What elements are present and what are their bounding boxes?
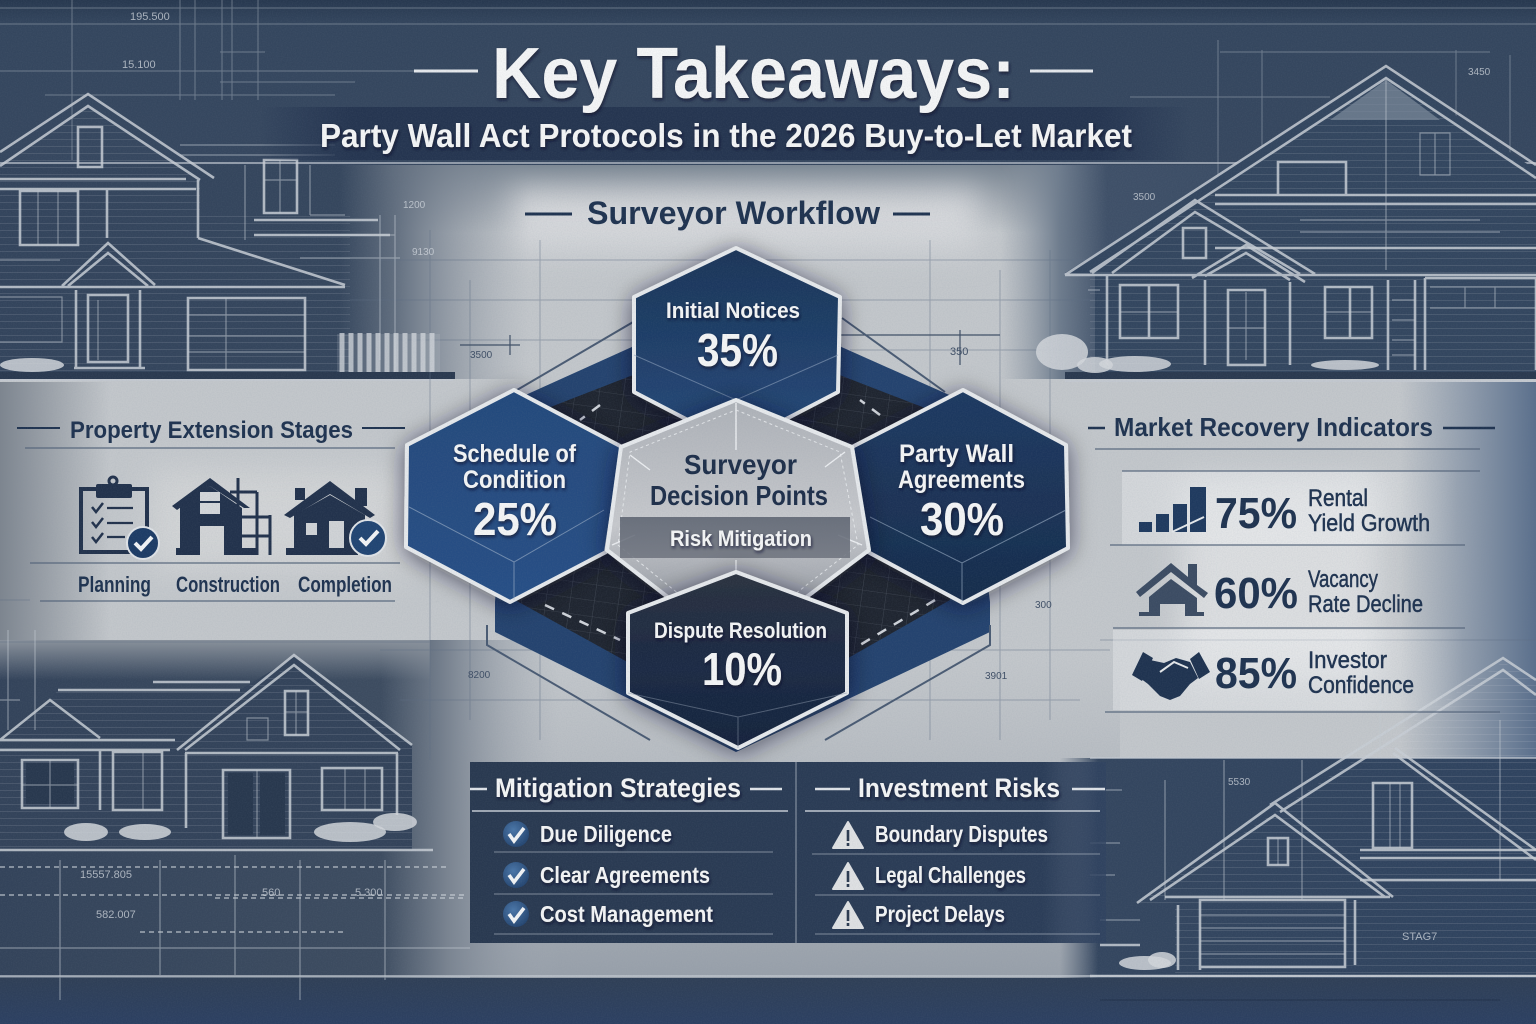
party wall agreements label: Party Wall: [899, 440, 1014, 468]
icon: house: [1136, 563, 1208, 616]
background: blueprint texture: 8200: [468, 670, 491, 681]
background: blueprint texture: 15.100: [122, 59, 156, 71]
heading: investment risks: Investment Risks: [858, 773, 1060, 803]
heading: surveyor workflow: Surveyor Workflow: [587, 195, 880, 231]
risk mitigation label: Risk Mitigation: [670, 526, 812, 551]
list item: project delays: Project Delays: [875, 901, 1005, 927]
indicator: vacancy rate decline: Rate Decline: [1308, 591, 1423, 618]
background: blueprint texture: 582.007: [96, 909, 136, 921]
indicator: rental yield growth: Yield Growth: [1308, 510, 1430, 537]
list item: cost management: Cost Management: [540, 901, 713, 927]
background: blueprint texture: 3901: [985, 671, 1008, 682]
column: investment risks: [805, 773, 1105, 934]
stage labels: Planning: [78, 572, 151, 597]
panel: property extension stages: [17, 417, 405, 601]
title: Key Takeaways:: [492, 34, 1015, 114]
list item: boundary disputes: Boundary Disputes: [875, 821, 1048, 847]
background: blueprint texture: 300: [1035, 600, 1052, 611]
indicator: rental yield growth: Rental: [1308, 485, 1368, 512]
stage labels: Construction: [176, 572, 280, 597]
list item: boundary disputes: [833, 821, 1048, 848]
illustration: top-right house: [1036, 66, 1536, 373]
stage labels: Completion: [298, 572, 392, 597]
heading: market recovery indicators: Market Recovery Indicators: [1114, 412, 1433, 442]
hexagon: dispute resolution: [628, 572, 847, 748]
background: blueprint texture: 1200: [403, 200, 426, 211]
schedule of condition value: 25%: [473, 493, 557, 545]
list item: project delays: [833, 901, 1005, 928]
background: blueprint texture: 5 300: [355, 887, 383, 899]
background: blueprint texture: 195.500: [130, 11, 170, 23]
party wall agreements label: [898, 440, 1025, 494]
background: blueprint texture: 3500: [1133, 192, 1156, 203]
indicator: investor confidence: Investor: [1308, 647, 1387, 674]
schedule of condition label: Condition: [463, 466, 566, 494]
initial notices value: 35%: [697, 324, 778, 376]
background: blueprint texture: 3450: [1468, 67, 1491, 78]
stage labels: [78, 572, 392, 597]
icon: completed home: [284, 481, 386, 556]
schedule of condition label: [453, 440, 577, 494]
background: blueprint texture: 9130: [412, 247, 435, 258]
hexagon: party wall agreements: [852, 390, 1068, 603]
center heading: Decision Points: [650, 480, 828, 511]
illustration: bottom-right house: [1090, 658, 1536, 1000]
party wall agreements value: 30%: [920, 493, 1004, 545]
background: blueprint texture: 350: [950, 346, 968, 358]
column: mitigation strategies: [470, 773, 788, 934]
list item: due diligence: [503, 821, 672, 847]
background: blueprint texture: 3500: [470, 350, 493, 361]
list item: clear agreements: Clear Agreements: [540, 862, 710, 888]
panel: mitigation strategies and investment risks: [470, 762, 1106, 943]
illustration: bottom-right house: STAG7: [1402, 931, 1437, 943]
schedule of condition label: Schedule of: [453, 440, 577, 468]
subtitle band: [260, 107, 1190, 160]
indicator: vacancy rate decline: Vacancy: [1308, 566, 1378, 593]
heading: mitigation strategies: Mitigation Strategies: [495, 773, 741, 803]
indicator: vacancy rate decline: 60%: [1214, 569, 1298, 618]
indicator: investor confidence: 85%: [1215, 649, 1297, 698]
icon: planning clipboard: [81, 477, 159, 559]
list item: due diligence: Due Diligence: [540, 821, 672, 847]
indicator: rental yield growth: 75%: [1215, 489, 1297, 538]
party wall agreements label: Agreements: [898, 466, 1025, 494]
illustration: bottom-left house: [0, 630, 470, 1000]
icon: handshake: [1132, 652, 1210, 700]
hexagon: initial notices: [634, 248, 840, 445]
background: blueprint texture: 5530: [1228, 777, 1251, 788]
center heading: Surveyor: [684, 449, 797, 480]
background: blueprint texture: 560: [262, 887, 280, 899]
illustration: top-left house: [0, 94, 440, 372]
indicator: rental yield growth: [1139, 485, 1430, 538]
hexagon: schedule of condition: [406, 390, 622, 602]
icon: construction house: [172, 478, 270, 555]
icon: bar chart: [1139, 487, 1206, 532]
dispute resolution label: Dispute Resolution: [654, 618, 827, 643]
subtitle: Party Wall Act Protocols in the 2026 Buy-to-Let Market: [320, 117, 1132, 154]
background: blueprint texture: 15557.805: [80, 869, 132, 881]
indicator: investor confidence: Confidence: [1308, 672, 1414, 699]
indicator: vacancy rate decline: [1136, 563, 1423, 618]
list item: legal challenges: Legal Challenges: [875, 862, 1026, 888]
panel: market recovery indicators: [1088, 412, 1500, 712]
title block: [260, 34, 1190, 160]
hex diagram backdrop: [487, 300, 990, 752]
dispute resolution value: 10%: [702, 643, 782, 695]
indicator: investor confidence: [1132, 647, 1414, 700]
initial notices label: Initial Notices: [666, 298, 800, 323]
center heading: [650, 449, 828, 511]
list item: legal challenges: [833, 862, 1026, 889]
hexagon: surveyor decision points: [607, 400, 869, 650]
heading: property extension stages: Property Extension Stages: [70, 417, 353, 444]
